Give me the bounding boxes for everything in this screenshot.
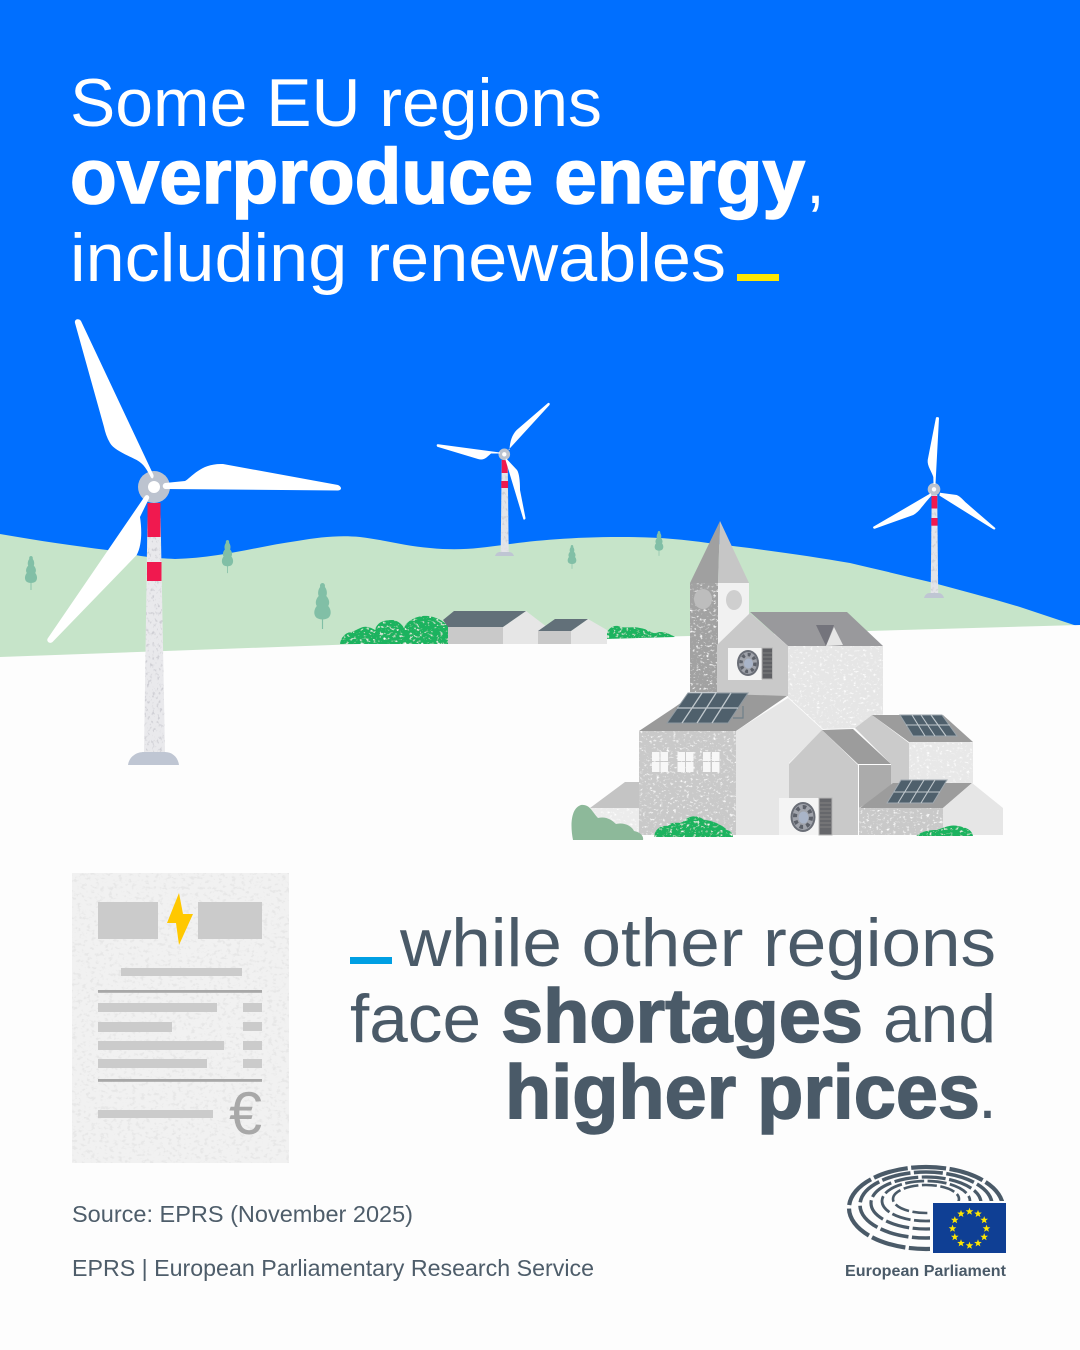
logo wordmark: European Parliament [845, 1263, 1007, 1280]
lower headline: higher prices [505, 1050, 980, 1135]
electricity bill icon [72, 873, 289, 1163]
blue dash [350, 957, 392, 964]
solar panel 3 [887, 780, 947, 803]
right wind turbine [873, 417, 995, 598]
blue sky background [0, 0, 1080, 700]
solar panel 2 [900, 715, 957, 736]
source text: Source: EPRS (November 2025) [72, 1201, 413, 1227]
distant farmhouses [443, 611, 607, 644]
main left wall with windows [639, 731, 736, 835]
white foreground [0, 625, 1080, 1350]
main light gable [736, 698, 823, 835]
upper textured wall [788, 646, 883, 729]
lower right wing [859, 783, 1003, 835]
middle roof [639, 693, 787, 731]
lower headline: shortages [501, 974, 863, 1059]
green hills [0, 534, 1080, 700]
hemicycle arcs [849, 1167, 1003, 1249]
lower headline [350, 905, 997, 1135]
lower headline: . [978, 1057, 997, 1133]
lower headline: while other regions [399, 905, 996, 981]
euro sign: € [229, 1080, 262, 1147]
lightning bolt [167, 893, 193, 945]
European Parliament logo [845, 1167, 1010, 1280]
EU flag [933, 1203, 1006, 1253]
heat pump lower [779, 798, 832, 835]
lower headline: and [883, 981, 996, 1057]
middle wind turbine [437, 403, 550, 556]
right side annex [855, 715, 973, 785]
title: Some EU regions [70, 65, 602, 141]
lower left annex [590, 782, 639, 835]
upper nave roof [750, 612, 883, 646]
title: including renewables [70, 220, 726, 296]
foreground bushes [572, 805, 973, 840]
clock tower [690, 521, 749, 692]
heat pump upper [728, 648, 772, 680]
title: , [806, 142, 825, 218]
large wind turbine [47, 319, 341, 765]
trees [25, 531, 663, 629]
lower headline: face [350, 981, 481, 1057]
yellow dash [737, 274, 779, 281]
solar panel 1 [667, 693, 748, 723]
upper gable [717, 613, 788, 696]
church building group with solar panels and heat pumps [572, 521, 1003, 840]
EPRS credit: EPRS | European Parliamentary Research Service [72, 1255, 594, 1281]
title: overproduce energy [70, 132, 805, 220]
front house [789, 729, 891, 835]
title [70, 65, 825, 296]
distant bushes [340, 616, 675, 644]
